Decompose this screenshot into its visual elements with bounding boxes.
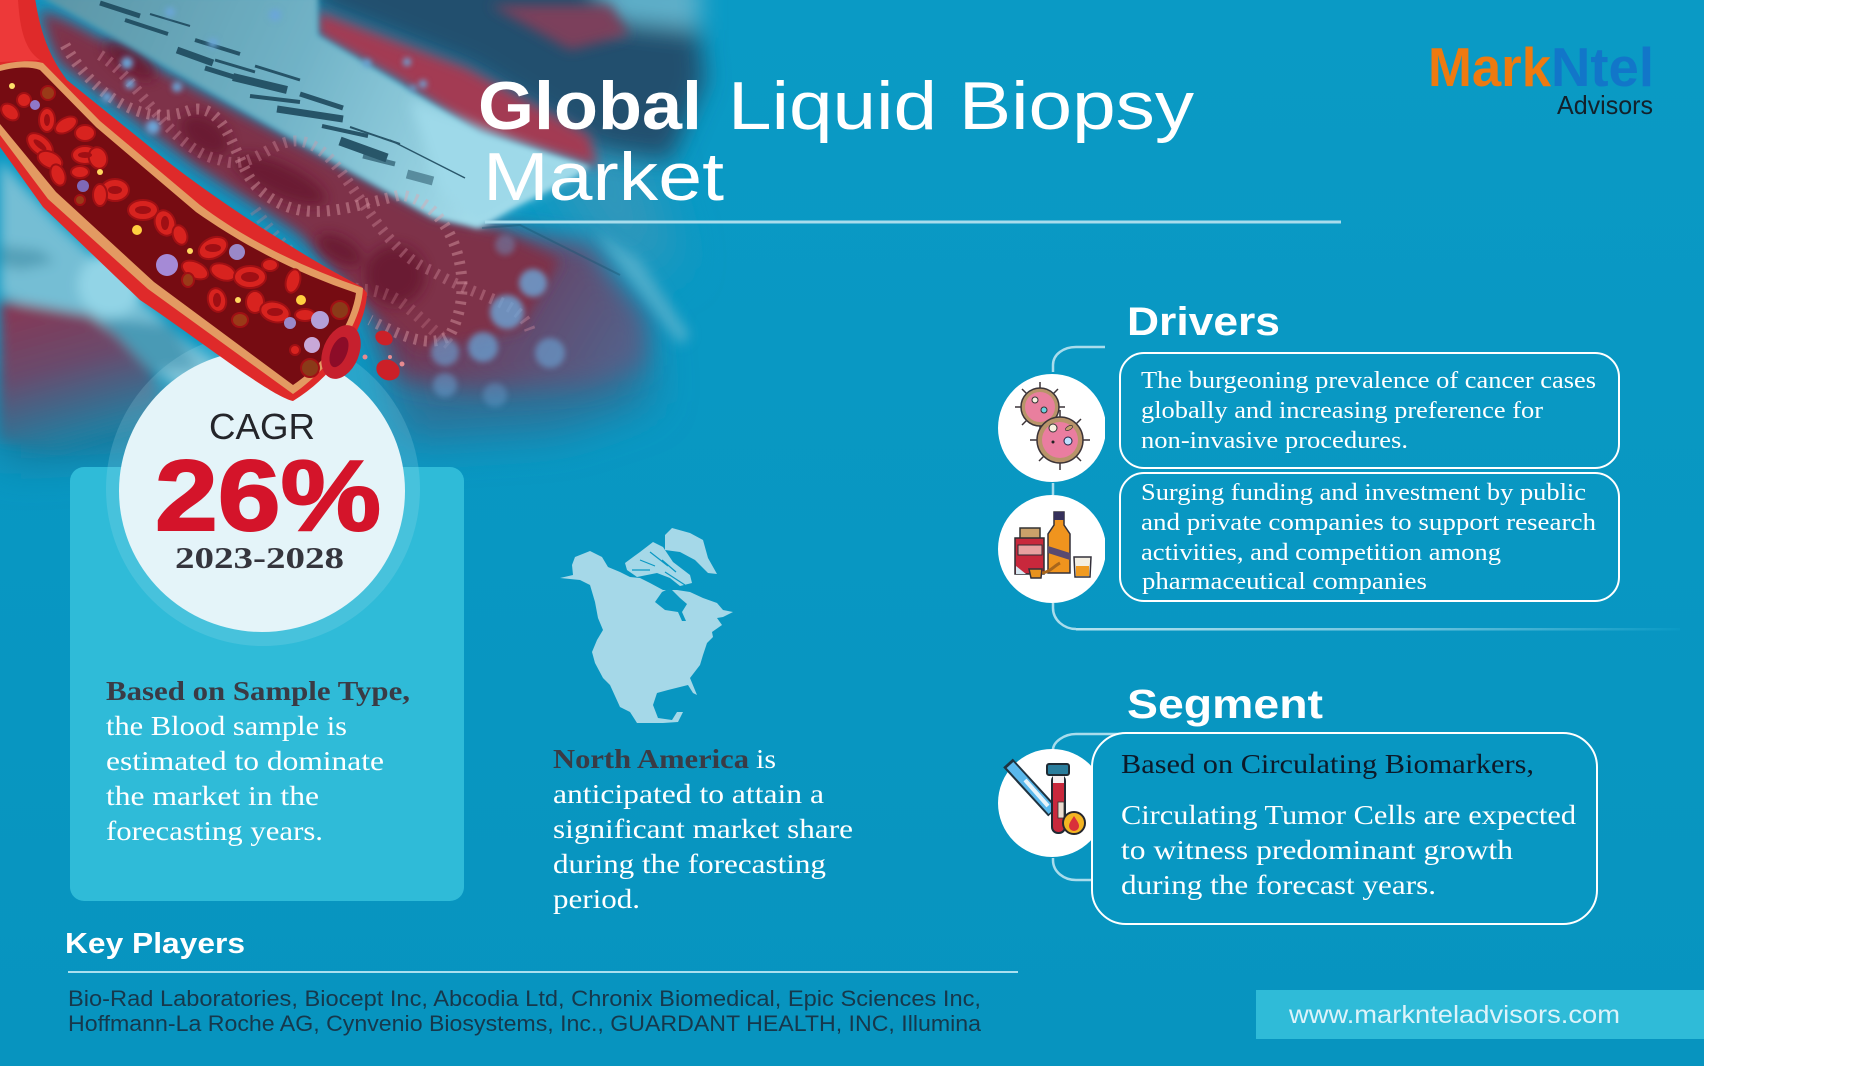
forecast period: 2023-2028	[175, 540, 344, 575]
logo: Ntel	[1551, 36, 1654, 98]
driver box 1: non-invasive procedures.	[1141, 428, 1408, 454]
segment box	[1092, 733, 1597, 924]
North America text: is	[756, 744, 776, 774]
segment box: Based on Circulating Biomarkers,	[1121, 749, 1534, 779]
drivers heading: Drivers	[1127, 300, 1280, 344]
segment box: during the forecast years.	[1121, 870, 1436, 900]
icon: cigarettes and alcohol	[998, 495, 1106, 603]
icon: virus cells	[998, 374, 1106, 482]
driver box 2	[1120, 473, 1619, 601]
DNA helix texture	[65, 45, 530, 345]
droplet cells	[362, 328, 404, 384]
sample type text: forecasting years.	[106, 816, 323, 846]
North America text: North America	[553, 744, 750, 774]
driver box 1: The burgeoning prevalence of cancer cases	[1141, 368, 1596, 394]
driver box 2: and private companies to support research	[1141, 510, 1596, 536]
panel: CAGR and sample type card	[70, 467, 464, 901]
vessel outer wall	[0, 0, 367, 401]
light tube band	[38, 0, 620, 275]
website bar	[1256, 990, 1704, 1039]
key players list	[68, 986, 982, 1036]
driver box 2: activities, and competition among	[1141, 540, 1501, 566]
icon: North America map	[560, 528, 733, 723]
driver box 2: Surging funding and investment by public	[1141, 480, 1586, 506]
driver box 1	[1120, 353, 1619, 468]
blood vessel illustration	[0, 0, 404, 401]
sample type text	[106, 676, 410, 846]
title: Global	[478, 68, 702, 144]
title: Market	[483, 139, 724, 215]
cell centers	[32, 114, 283, 316]
drivers connector	[1053, 347, 1680, 630]
key players heading: Key Players	[65, 928, 245, 960]
website bar: www.marknteladvisors.com	[1288, 1001, 1620, 1029]
sample type text: the Blood sample is	[106, 711, 347, 741]
segment box: to witness predominant growth	[1121, 835, 1514, 865]
driver box 2: pharmaceutical companies	[1142, 569, 1427, 595]
North America text: period.	[553, 884, 640, 914]
dark red patches between DNA strands	[99, 33, 425, 305]
segment heading: Segment	[1127, 681, 1323, 727]
title: Liquid Biopsy	[728, 68, 1194, 144]
yellow and purple cells	[9, 83, 329, 353]
logo	[1428, 36, 1654, 120]
sample type text: the market in the	[106, 781, 319, 811]
CAGR circle	[106, 332, 420, 646]
segment connector	[1053, 734, 1120, 880]
key players list: Bio-Rad Laboratories, Biocept Inc, Abcodia Ltd, Chronix Biomedical, Epic Sciences Inc,	[68, 986, 981, 1011]
blood cells	[0, 86, 349, 377]
blurred laboratory background photo	[0, 0, 705, 460]
blue bokeh dots	[102, 7, 565, 407]
vessel interior	[0, 61, 363, 394]
title	[478, 68, 1194, 215]
logo: Mark	[1428, 36, 1551, 98]
icon: test tubes circle	[998, 749, 1106, 857]
North America text: anticipated to attain a	[553, 779, 824, 809]
red cell at vessel end	[314, 319, 368, 385]
CAGR label: CAGR	[209, 406, 315, 447]
North America text: significant market share	[553, 814, 853, 844]
CAGR value: 26%	[155, 440, 381, 552]
key players list: Hoffmann-La Roche AG, Cynvenio Biosystems, Inc., GUARDANT HEALTH, INC, Illumina	[68, 1011, 982, 1036]
North America text	[553, 744, 853, 914]
driver box 1: globally and increasing preference for	[1141, 398, 1543, 424]
sample type text: estimated to dominate	[106, 746, 384, 776]
sample type text: Based on Sample Type,	[106, 676, 410, 706]
logo: Advisors	[1557, 90, 1653, 120]
segment box: Circulating Tumor Cells are expected	[1121, 800, 1577, 830]
North America text: during the forecasting	[553, 849, 826, 879]
